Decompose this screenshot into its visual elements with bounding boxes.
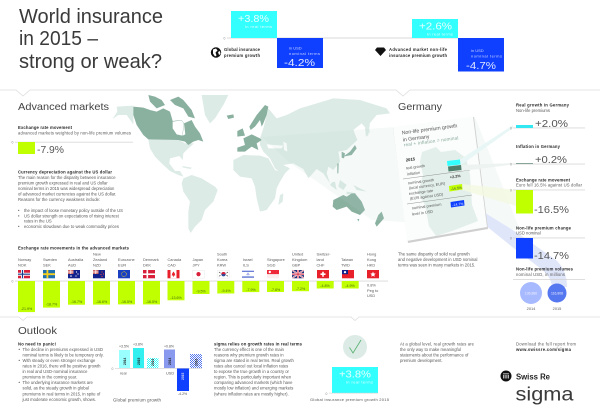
world map xyxy=(113,95,390,233)
country labels: Denmark xyxy=(143,257,159,262)
country labels: Norway xyxy=(18,257,31,262)
currency depreciation text xyxy=(18,170,123,229)
bars: -16.5% xyxy=(146,300,158,304)
global premium growth bar chart xyxy=(112,342,202,402)
currency depreciation text: economic slowdown due to weak commodity prices xyxy=(24,224,119,229)
swiss re logo: Swiss Re xyxy=(516,372,551,382)
section divider top xyxy=(0,90,600,96)
metric: non-life premium volumes: 2014 xyxy=(527,306,536,311)
beams from card to germany metrics xyxy=(460,125,516,206)
card text: real growth xyxy=(405,163,425,170)
country labels: GBP xyxy=(292,262,301,268)
global insurance growth box: +3.8% xyxy=(339,370,371,380)
exchange rate bar chart: Exchange rate movements in the advanced markets xyxy=(18,245,130,250)
nominal growth box: -4.7% xyxy=(466,61,496,72)
country labels: Australia xyxy=(68,257,84,262)
bars: -21.9% xyxy=(21,307,33,311)
card values: -14.7% xyxy=(452,202,464,207)
currency depreciation text: • xyxy=(18,224,20,229)
heading: advanced markets: Advanced markets xyxy=(18,101,109,113)
bars: -16.6% xyxy=(96,300,108,304)
closing text: At a global level, real growth rates are xyxy=(400,342,475,347)
beam: non-life premium change xyxy=(464,200,567,287)
real growth box: in real terms xyxy=(245,24,272,29)
card text: inflation xyxy=(406,170,420,176)
sigma real terms text: sigma relies on growth rates in real terms xyxy=(214,342,303,347)
outlook text: no need to panic: With steady or even stronger exchange xyxy=(22,358,96,363)
swiss re logo xyxy=(500,370,551,382)
card text: (local currency, EUR) xyxy=(408,181,446,190)
outlook text: no need to panic: The decline in premiums expressed in USD xyxy=(22,347,103,352)
country labels: Eurozone xyxy=(118,257,135,262)
global growth label: Global insurance xyxy=(224,47,261,52)
global insurance growth box xyxy=(310,367,390,402)
metric: non-life premium change: -14.7% xyxy=(534,251,569,262)
currency depreciation text: Currency depreciation against the US dollar xyxy=(18,170,112,174)
country labels xyxy=(18,252,376,268)
country labels: CAD xyxy=(168,262,176,268)
global premium growth bar chart: +3.5% xyxy=(119,344,129,348)
metric: non-life premium volumes xyxy=(513,266,585,311)
outlook text: no need to panic: • xyxy=(18,380,20,385)
bars: 0.8% xyxy=(367,282,376,288)
nominal growth box: nominal terms xyxy=(471,54,502,58)
bars: -13.6% xyxy=(170,296,182,300)
nominal growth box xyxy=(277,38,323,69)
global insurance growth box: in real terms xyxy=(346,380,373,384)
exchange rate bar chart xyxy=(12,245,388,312)
germany text: terms was seen in many markets in 2015. xyxy=(398,262,475,268)
sigma real terms text: sigma are stated in real terms. Real growth xyxy=(214,358,294,363)
global premium growth bar chart: 0 xyxy=(112,367,114,371)
metric: inflation in germany: 0 xyxy=(510,162,512,166)
currency depreciation text: Reasons for the currency weakness include: xyxy=(18,197,100,202)
card text: real + inflation = nominal xyxy=(403,135,459,147)
section divider bottom xyxy=(0,317,600,320)
real growth box xyxy=(231,11,277,38)
global premium growth bar chart: 2016 xyxy=(151,358,155,366)
icon: globe xyxy=(211,47,221,58)
country labels: South xyxy=(217,252,227,256)
global growth label: premium growth xyxy=(224,53,260,58)
currency depreciation text: • xyxy=(18,208,20,213)
nominal growth box: nominal terms xyxy=(289,51,320,56)
global premium growth bar chart: +3.8% xyxy=(133,342,143,346)
outlook text: no need to panic: just moderate economic growth, shows. xyxy=(22,397,96,402)
country labels: Taiwan xyxy=(341,257,353,262)
global premium growth bar chart: 2015 xyxy=(137,357,141,365)
country labels: Japan xyxy=(192,257,203,262)
nominal growth box: -4.2% xyxy=(284,58,315,69)
bars: -7.2% xyxy=(296,287,306,291)
country labels: ILS xyxy=(243,262,249,268)
title: in 2015 – xyxy=(19,27,99,50)
outlook text: no need to panic: • xyxy=(18,347,20,352)
sigma real terms text: comparing advanced markets (which have xyxy=(214,380,293,385)
nominal growth box xyxy=(458,38,504,72)
country labels: Kingdom xyxy=(292,257,307,262)
outlook text: no need to panic xyxy=(18,342,104,402)
bars: -9.5% xyxy=(196,290,206,294)
country labels: Canada xyxy=(168,257,182,262)
exchange rate summary: Exchange rate movement xyxy=(18,125,73,130)
sigma real terms text: (where inflation rates are mostly higher). xyxy=(214,391,289,396)
country labels: TWD xyxy=(341,262,350,268)
metric: exchange rate movement: 0 xyxy=(510,188,512,192)
global premium growth bar chart: USD xyxy=(166,370,174,376)
exchange rate summary: advanced markets weighted by non-life premium volumes xyxy=(18,130,131,135)
sigma wordmark: sigma xyxy=(516,384,574,406)
currency depreciation text: of advanced market currencies against the US dollar. xyxy=(18,192,116,196)
closing text: statements about the performance of xyxy=(400,353,469,358)
metric: exchange rate movement: -16.5% xyxy=(534,205,569,216)
global premium growth bar chart: +0.8% xyxy=(164,344,174,348)
bars: 0 xyxy=(12,280,14,284)
metric: inflation in germany: Inflation in Germany xyxy=(516,144,561,149)
outlook text: no need to panic: rates in 2016, there will be positive growth xyxy=(22,364,101,369)
bars: -16.5% xyxy=(121,300,133,304)
card text: (EUR against USD) xyxy=(409,192,444,201)
country labels: Israel xyxy=(243,257,253,262)
bars: -16.7% xyxy=(71,300,83,304)
real growth box xyxy=(412,19,458,38)
closing text: premium development. xyxy=(400,358,443,363)
real growth box: +2.6% xyxy=(419,22,452,32)
card text: nominal premium xyxy=(411,202,442,210)
global premium growth bar chart: -4.2% xyxy=(178,392,187,396)
metric: non-life premium volumes: Non-life premium volumes xyxy=(516,266,574,271)
title: strong or weak? xyxy=(19,50,162,73)
download link: www.swissre.com/sigma xyxy=(515,347,572,352)
country labels: KRW xyxy=(217,262,226,268)
nominal growth box: in USD xyxy=(471,48,484,53)
metric: non-life premium change xyxy=(510,225,585,262)
heading: germany: Germany xyxy=(398,101,443,113)
download link xyxy=(515,342,576,352)
card text: 2015 xyxy=(405,156,416,162)
global premium growth chart xyxy=(211,11,458,69)
country labels: HKD xyxy=(367,262,375,268)
sigma real terms text xyxy=(214,342,303,396)
bars: USD xyxy=(367,293,375,298)
real growth box: in real terms xyxy=(427,32,453,37)
metric: real growth in germany: +2.0% xyxy=(535,119,568,130)
metric: inflation in germany: +0.2% xyxy=(535,155,567,166)
currency depreciation text: the impact of loose monetary policy outside of the US xyxy=(24,208,123,213)
metric: exchange rate movement: Exchange rate movement xyxy=(516,177,571,182)
nominal growth box: in USD xyxy=(289,46,302,50)
heading: outlook: Outlook xyxy=(18,325,58,337)
title: World insurance xyxy=(19,5,163,28)
country labels: Switzer- xyxy=(316,252,331,256)
germany text xyxy=(398,251,477,268)
card text: exchange rate xyxy=(408,188,434,196)
country labels: New xyxy=(93,252,101,256)
advanced market label xyxy=(389,47,448,58)
metric: non-life premium change: USD nominal xyxy=(516,230,541,236)
country labels: DKK xyxy=(143,262,151,268)
currency depreciation text: nominal terms in 2015 was widespread depreciation xyxy=(18,186,115,191)
icon: check mark xyxy=(343,335,367,359)
outlook text: no need to panic: nominal terms is likely to be temporary only. xyxy=(22,352,104,357)
real growth box: +3.8% xyxy=(238,14,269,25)
global growth label xyxy=(224,47,261,58)
metric: real growth in germany: Real growth in Germany xyxy=(516,102,570,108)
metric: non-life premium volumes: nominal USD, in millions xyxy=(516,272,565,277)
country labels: Korea xyxy=(217,257,228,262)
country labels: CHF xyxy=(316,262,325,268)
country labels: SEK xyxy=(43,262,51,268)
country labels: AUD xyxy=(68,262,76,268)
sigma real terms text: region. This is particularly important when xyxy=(214,375,292,380)
flags xyxy=(18,270,379,278)
metric: real growth in germany: 0 xyxy=(510,126,512,130)
card text: Non-life premium growth xyxy=(401,123,458,136)
bars: -4.8% xyxy=(320,284,330,288)
sigma real terms text: mostly low inflation) and emerging markets xyxy=(214,386,293,391)
card values: -16.5% xyxy=(451,186,462,191)
country labels: United xyxy=(292,252,303,256)
metric: real growth in germany: Non-life premiums xyxy=(516,108,550,113)
country labels: JPY xyxy=(192,262,200,268)
germany text: and negative development in USD nominal xyxy=(398,257,477,262)
global premium growth chart: 0 xyxy=(224,36,226,40)
advanced market premium growth chart xyxy=(375,19,504,72)
bars: -9.4% xyxy=(221,289,231,293)
bars: -18.7% xyxy=(46,302,58,306)
metric: exchange rate movement: Euro fell 16.5% against US dollar xyxy=(516,182,583,188)
bars: Peg to xyxy=(367,288,378,293)
icon: diamond xyxy=(375,48,386,56)
metric: non-life premium volumes: 116,808 xyxy=(551,291,563,295)
outlook text: no need to panic: in real and USD-nominal insurance xyxy=(22,369,88,374)
card text xyxy=(401,123,459,216)
closing text: the only way to make meaningful xyxy=(400,347,461,352)
sigma real terms text: The currency effect is one of the main xyxy=(214,347,285,352)
download link: Download the full report from xyxy=(516,342,576,347)
global insurance growth box: Global insurance premium growth 2015 xyxy=(310,397,390,402)
global premium growth bar chart: 2014 xyxy=(123,357,127,365)
bars: -7.8% xyxy=(271,288,281,292)
metric: non-life premium change: Non-life premium change xyxy=(516,225,572,230)
metric: non-life premium volumes: 136,886 xyxy=(525,291,537,295)
global premium growth bar chart: 2016 xyxy=(194,358,198,366)
exchange rate summary: 0 xyxy=(12,140,14,144)
metric: non-life premium volumes: 2015 xyxy=(553,306,561,311)
global premium growth bar chart: real xyxy=(120,370,127,376)
currency depreciation text: US dollar strength on expectations of rising interest xyxy=(24,214,120,218)
sigma real terms text: reasons why premium growth rates in xyxy=(214,352,284,357)
closing text xyxy=(400,342,475,363)
outlook text: no need to panic: premiums in the coming year. xyxy=(22,375,77,380)
exchange rate summary: -7.9% xyxy=(37,145,64,156)
metric: exchange rate movement xyxy=(510,177,585,216)
bars: -7.9% xyxy=(246,288,256,292)
country labels: NOK xyxy=(18,262,27,268)
bars xyxy=(12,280,388,312)
country labels: land xyxy=(316,257,324,262)
metric: non-life premium change: 0 xyxy=(510,236,512,240)
outlook text: no need to panic: • xyxy=(18,358,20,363)
outlook text: no need to panic: solid, as the steady growth in global xyxy=(22,386,89,391)
title xyxy=(19,5,163,73)
global premium growth bar chart: Global premium growth xyxy=(113,398,162,402)
advanced market label: insurance premium growth xyxy=(389,53,447,58)
outlook text: no need to panic: No need to panic! xyxy=(18,342,56,347)
card values: +2.2% xyxy=(450,174,462,179)
country labels: Kong xyxy=(367,257,376,262)
country labels: Sweden xyxy=(43,257,57,262)
card text: in Germany xyxy=(402,134,430,143)
card text: level in USD xyxy=(411,209,434,216)
card values xyxy=(447,160,464,208)
country labels: SGD xyxy=(267,262,276,268)
currency depreciation text: • xyxy=(18,214,20,218)
currency depreciation text: premium growth expressed in real and US dollar xyxy=(18,180,108,186)
sigma real terms text: rates also cancel out local inflation rates xyxy=(214,364,288,369)
currency depreciation text: The main reason for the disparity between insurance xyxy=(18,175,116,180)
country labels: Zealand xyxy=(93,257,107,262)
card text: nominal growth xyxy=(407,177,434,185)
advanced market label: Advanced market non-life xyxy=(389,47,448,52)
outlook text: no need to panic: The underlying insurance markets are xyxy=(22,380,93,385)
global insurance growth box: 0 xyxy=(326,392,328,396)
metric: real growth in germany xyxy=(510,102,585,130)
sigma real terms text: to expose the true growth in a country or xyxy=(214,369,290,374)
outlook text: no need to panic: premiums in real terms in 2015, in spite of xyxy=(22,391,101,396)
germany map silhouette xyxy=(418,147,478,236)
country labels: Singapore xyxy=(267,257,285,262)
bars: -4.9% xyxy=(345,284,355,288)
projection beam from Europe to Germany card xyxy=(262,117,520,230)
global premium growth bar chart: 2014 xyxy=(168,357,172,365)
germany calculation card xyxy=(393,116,488,243)
currency depreciation text: rates in the US xyxy=(24,218,52,224)
metric: inflation in germany xyxy=(510,144,585,166)
country labels: Hong xyxy=(367,252,376,256)
country labels: EUR xyxy=(118,262,126,268)
germany text: The same disparity of solid real growth xyxy=(398,251,470,256)
global premium growth bar chart: 2015 xyxy=(181,372,185,380)
exchange rate summary xyxy=(12,125,133,156)
country labels: NZD xyxy=(93,262,101,268)
